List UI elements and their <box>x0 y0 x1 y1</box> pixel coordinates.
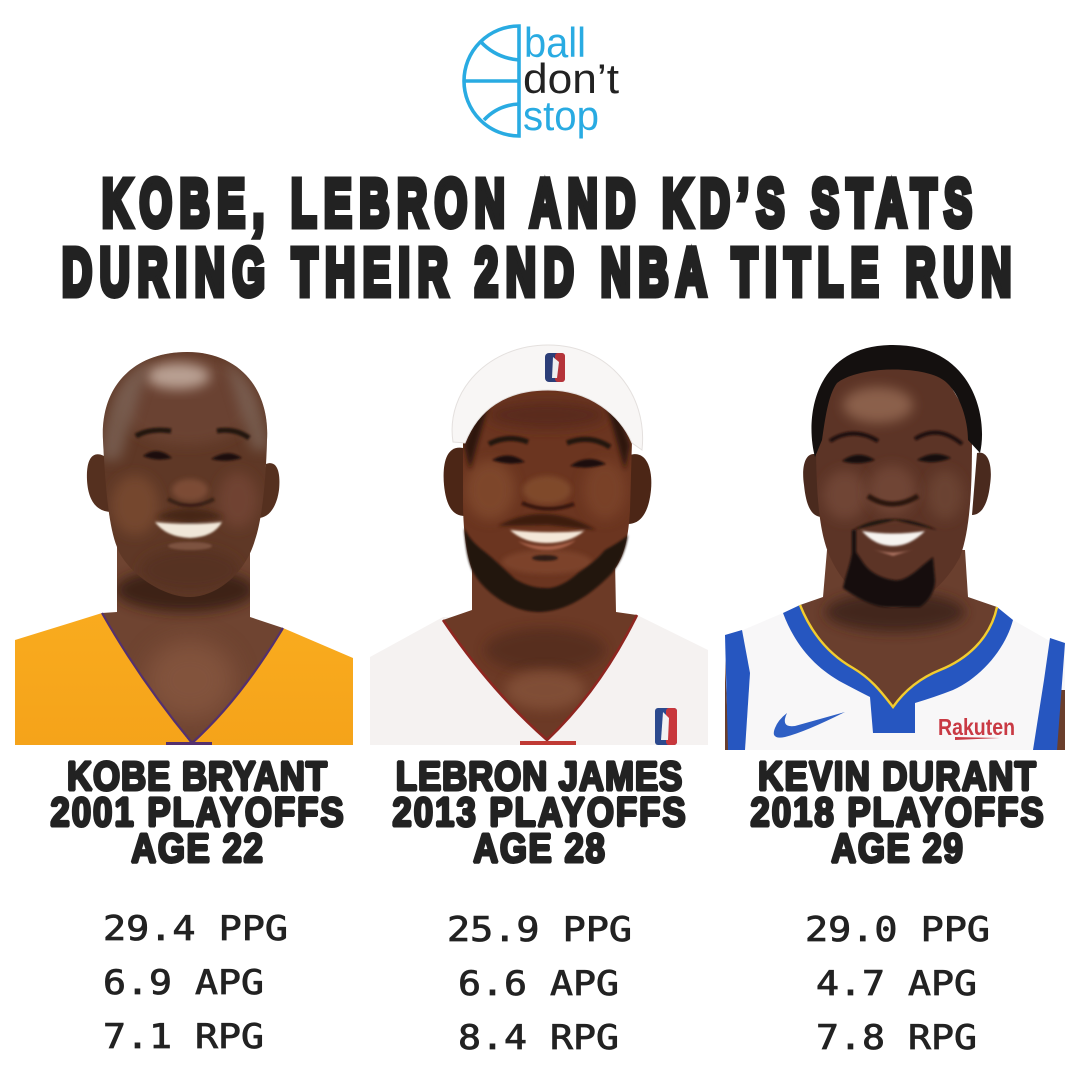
player label: LeBron: AGE 28 <box>473 826 605 872</box>
panel: Kevin Durant <box>725 345 1065 1058</box>
neck and chest <box>103 547 283 742</box>
head <box>102 352 268 597</box>
player label: Durant: KEVIN DURANT <box>758 754 1036 800</box>
jersey <box>370 615 708 745</box>
logo wordmark: don’t <box>523 55 619 102</box>
icon: NBA logo on jersey <box>655 708 677 745</box>
ears <box>87 454 112 512</box>
logo: ball don't stop <box>464 19 619 139</box>
title: KOBE, LEBRON AND KD’S STATS <box>102 166 972 240</box>
mustache area <box>156 508 224 523</box>
stats: LeBron: 25.9 PPG <box>447 910 632 950</box>
player label: Durant: AGE 29 <box>831 826 963 872</box>
goatee <box>843 530 935 607</box>
nose <box>523 476 571 504</box>
player label: Kobe: AGE 22 <box>131 826 263 872</box>
stats: Kobe <box>103 909 288 1057</box>
eyes <box>842 455 875 463</box>
stats: Kobe: 6.9 APG <box>103 963 264 1003</box>
panel: Kobe Bryant <box>15 345 353 1057</box>
collar <box>783 605 1013 733</box>
stats: LeBron <box>447 910 632 1058</box>
stats: Durant: 4.7 APG <box>816 964 977 1004</box>
side bands <box>725 630 750 750</box>
icon: Nike swoosh <box>774 712 845 738</box>
logo wordmark: stop <box>523 92 599 139</box>
logo wordmark <box>523 19 619 139</box>
smile <box>510 530 584 543</box>
player label: Durant <box>750 754 1044 872</box>
player label: LeBron <box>392 754 686 872</box>
mustache <box>498 514 596 530</box>
stats: LeBron: 6.6 APG <box>458 964 619 1004</box>
portrait: Kevin Durant <box>725 345 1065 750</box>
head <box>463 390 632 577</box>
portrait: LeBron James <box>370 345 708 745</box>
brows <box>489 438 528 444</box>
hair <box>811 345 982 457</box>
headband <box>452 345 643 450</box>
ears <box>444 448 465 516</box>
neck and chest <box>443 568 637 738</box>
stats: Kobe: 29.4 PPG <box>103 909 288 949</box>
jersey <box>15 613 192 745</box>
nose <box>868 496 918 504</box>
stats: Kobe: 7.1 RPG <box>103 1017 264 1057</box>
eyes <box>492 455 525 464</box>
smile <box>862 531 925 546</box>
stats: Durant: 7.8 RPG <box>816 1018 977 1058</box>
brows <box>136 430 171 436</box>
icon: half basketball <box>464 26 519 136</box>
chin patch <box>532 555 558 561</box>
stats: LeBron: 8.4 RPG <box>458 1018 619 1058</box>
skin slivers <box>725 660 1065 750</box>
stats: Durant <box>805 910 990 1058</box>
player label: Kobe <box>50 754 344 872</box>
icon: NBA logo on headband <box>545 353 565 382</box>
player label: LeBron: LEBRON JAMES <box>396 754 682 800</box>
player label: Kobe: 2001 PLAYOFFS <box>50 790 344 836</box>
logo wordmark: ball <box>524 19 586 66</box>
eyes <box>143 451 172 460</box>
jersey sponsor: Rakuten <box>938 714 1015 740</box>
ears <box>803 454 822 517</box>
nose <box>172 479 208 501</box>
stats: Durant: 29.0 PPG <box>805 910 990 950</box>
neck and chest <box>800 550 997 705</box>
player label: LeBron: 2013 PLAYOFFS <box>392 790 686 836</box>
panel: LeBron James <box>370 345 708 1058</box>
mustache <box>853 519 937 530</box>
player label: Durant: 2018 PLAYOFFS <box>750 790 1044 836</box>
title <box>62 166 1011 309</box>
player label: Kobe: KOBE BRYANT <box>67 754 327 800</box>
title: DURING THEIR 2ND NBA TITLE RUN <box>62 235 1011 309</box>
brows <box>830 434 878 441</box>
icon: beard <box>464 528 628 612</box>
head <box>816 370 972 608</box>
smile <box>155 522 222 538</box>
portrait: Kobe Bryant <box>15 345 353 750</box>
jersey <box>725 613 1065 750</box>
